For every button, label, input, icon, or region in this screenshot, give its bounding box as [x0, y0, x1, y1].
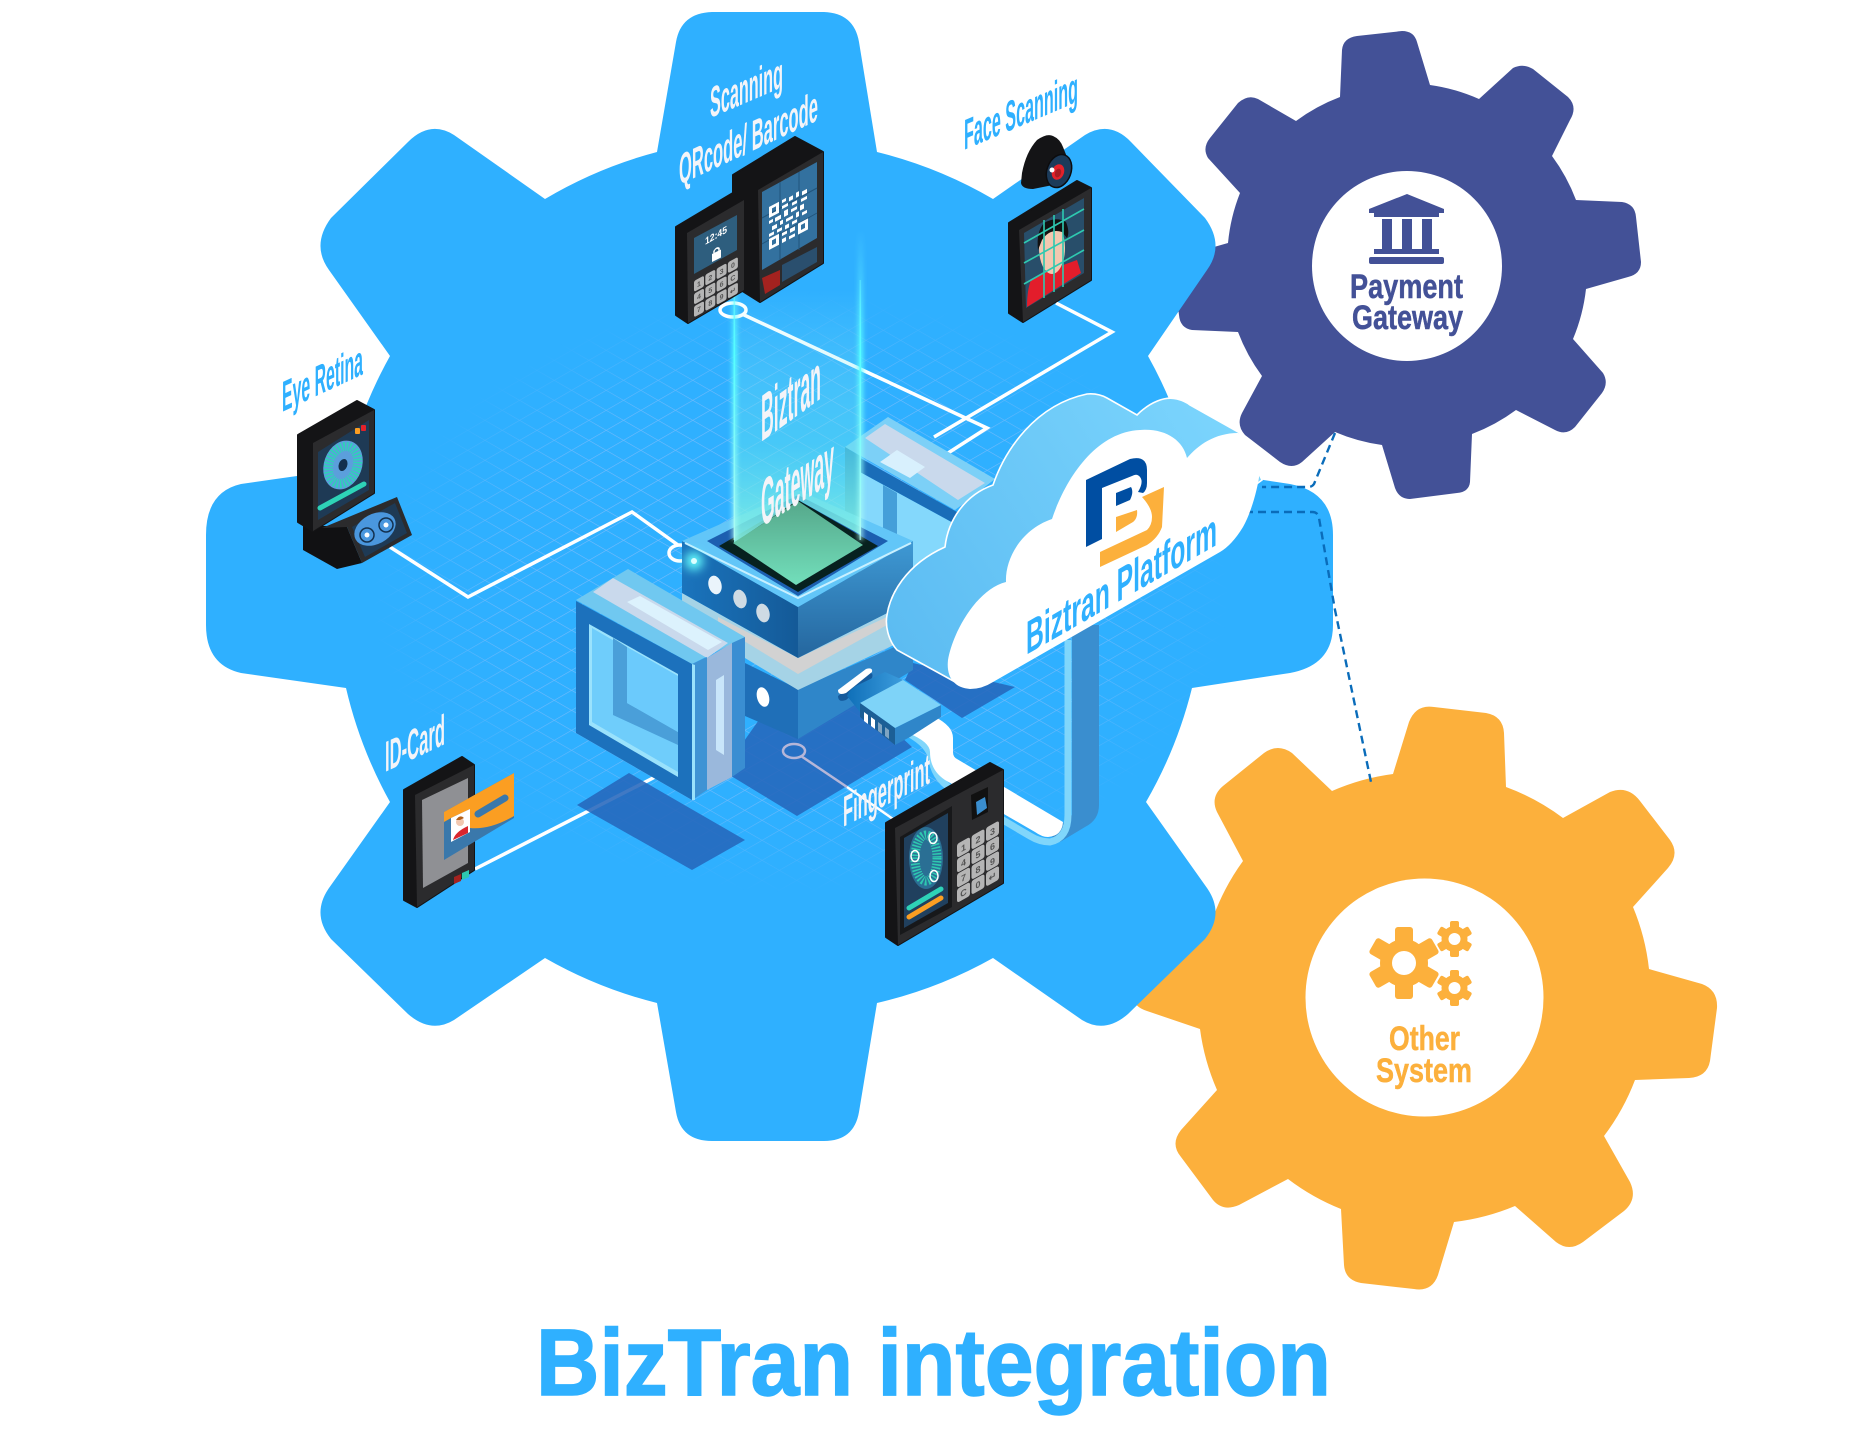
id card	[444, 773, 514, 860]
device: face scanner	[1009, 181, 1091, 322]
device: fingerprint	[886, 763, 1003, 945]
qr code	[769, 186, 808, 250]
label: other system	[1376, 1020, 1472, 1090]
keys: C	[730, 272, 736, 284]
connector tube	[908, 625, 1099, 842]
keys: 5	[708, 285, 712, 296]
keys: ↵	[989, 870, 996, 885]
device labels: ID-Card	[385, 705, 445, 781]
gear: payment gateway	[1173, 31, 1641, 499]
keys: ↵	[730, 285, 736, 296]
keys: 7	[697, 304, 701, 315]
title: BizTran integration	[536, 1310, 1331, 1416]
dashed connector: payment gateway	[1262, 433, 1335, 487]
device labels: Scanning	[710, 48, 783, 128]
device: keypad	[676, 193, 744, 323]
icon: lock	[712, 246, 721, 262]
label: other system: System	[1376, 1052, 1472, 1090]
keys: 1	[961, 842, 967, 855]
device: keypad: 12:45	[705, 224, 727, 248]
upper box	[682, 490, 913, 658]
middle band	[682, 593, 913, 690]
central tower	[682, 490, 913, 739]
upper right frame	[845, 417, 995, 640]
icon: camera	[1021, 135, 1076, 191]
keys: 2	[976, 834, 980, 847]
icon: gears	[1368, 921, 1472, 1006]
eye scanner head	[322, 497, 412, 563]
chip connector	[847, 672, 941, 745]
connector lines	[390, 303, 1112, 869]
keys: C	[960, 887, 967, 900]
left frame	[576, 569, 745, 800]
keys: 1	[697, 279, 701, 289]
logo: biztran	[1086, 458, 1164, 567]
text: Gateway	[761, 423, 834, 542]
label: payment gateway: Gateway	[1352, 299, 1463, 337]
keys: 3	[720, 266, 724, 277]
dashed connector: other system	[1245, 512, 1371, 782]
text: Biztran	[761, 339, 821, 456]
keys: 9	[720, 292, 724, 302]
label: payment gateway: Payment	[1350, 268, 1463, 306]
keys: 6	[720, 279, 724, 289]
device: id card reader	[404, 757, 514, 907]
label: other system: Other	[1389, 1020, 1460, 1058]
keys	[957, 820, 999, 903]
label: biztran gateway	[761, 339, 834, 542]
keys	[694, 257, 738, 317]
keys: 3	[990, 825, 996, 839]
device labels: Eye Retina	[282, 335, 363, 421]
marker line: fingerprint	[783, 744, 893, 819]
gear: main platform	[206, 12, 1333, 1141]
lower box	[745, 639, 913, 739]
keys: 5	[976, 849, 981, 862]
label: biztran platform: Biztran Platform	[1026, 502, 1217, 665]
keys: 8	[708, 298, 712, 308]
keys: 4	[961, 857, 967, 870]
keys: 0	[976, 879, 980, 892]
hologram beam	[732, 230, 863, 543]
person	[1027, 219, 1081, 307]
isometric grid floor	[388, 304, 1214, 882]
keys: 0	[731, 260, 735, 271]
floor shadows	[577, 663, 1015, 870]
label: payment gateway	[1350, 268, 1463, 337]
keys: 4	[697, 291, 702, 302]
device labels: Fingerprint	[843, 744, 930, 836]
scan lines	[1024, 209, 1084, 298]
green chip	[733, 501, 863, 585]
gear: other system	[1132, 707, 1717, 1289]
cloud: biztran platform	[886, 394, 1262, 689]
keys: 9	[990, 855, 996, 869]
icon: bank	[1369, 194, 1444, 264]
keys: 6	[990, 840, 996, 854]
device: eye retina	[298, 401, 412, 569]
keys: 8	[976, 864, 981, 877]
device labels	[282, 48, 1078, 836]
device: qr scanner	[733, 137, 823, 302]
keys: 7	[961, 872, 966, 885]
keys: 2	[708, 272, 712, 283]
